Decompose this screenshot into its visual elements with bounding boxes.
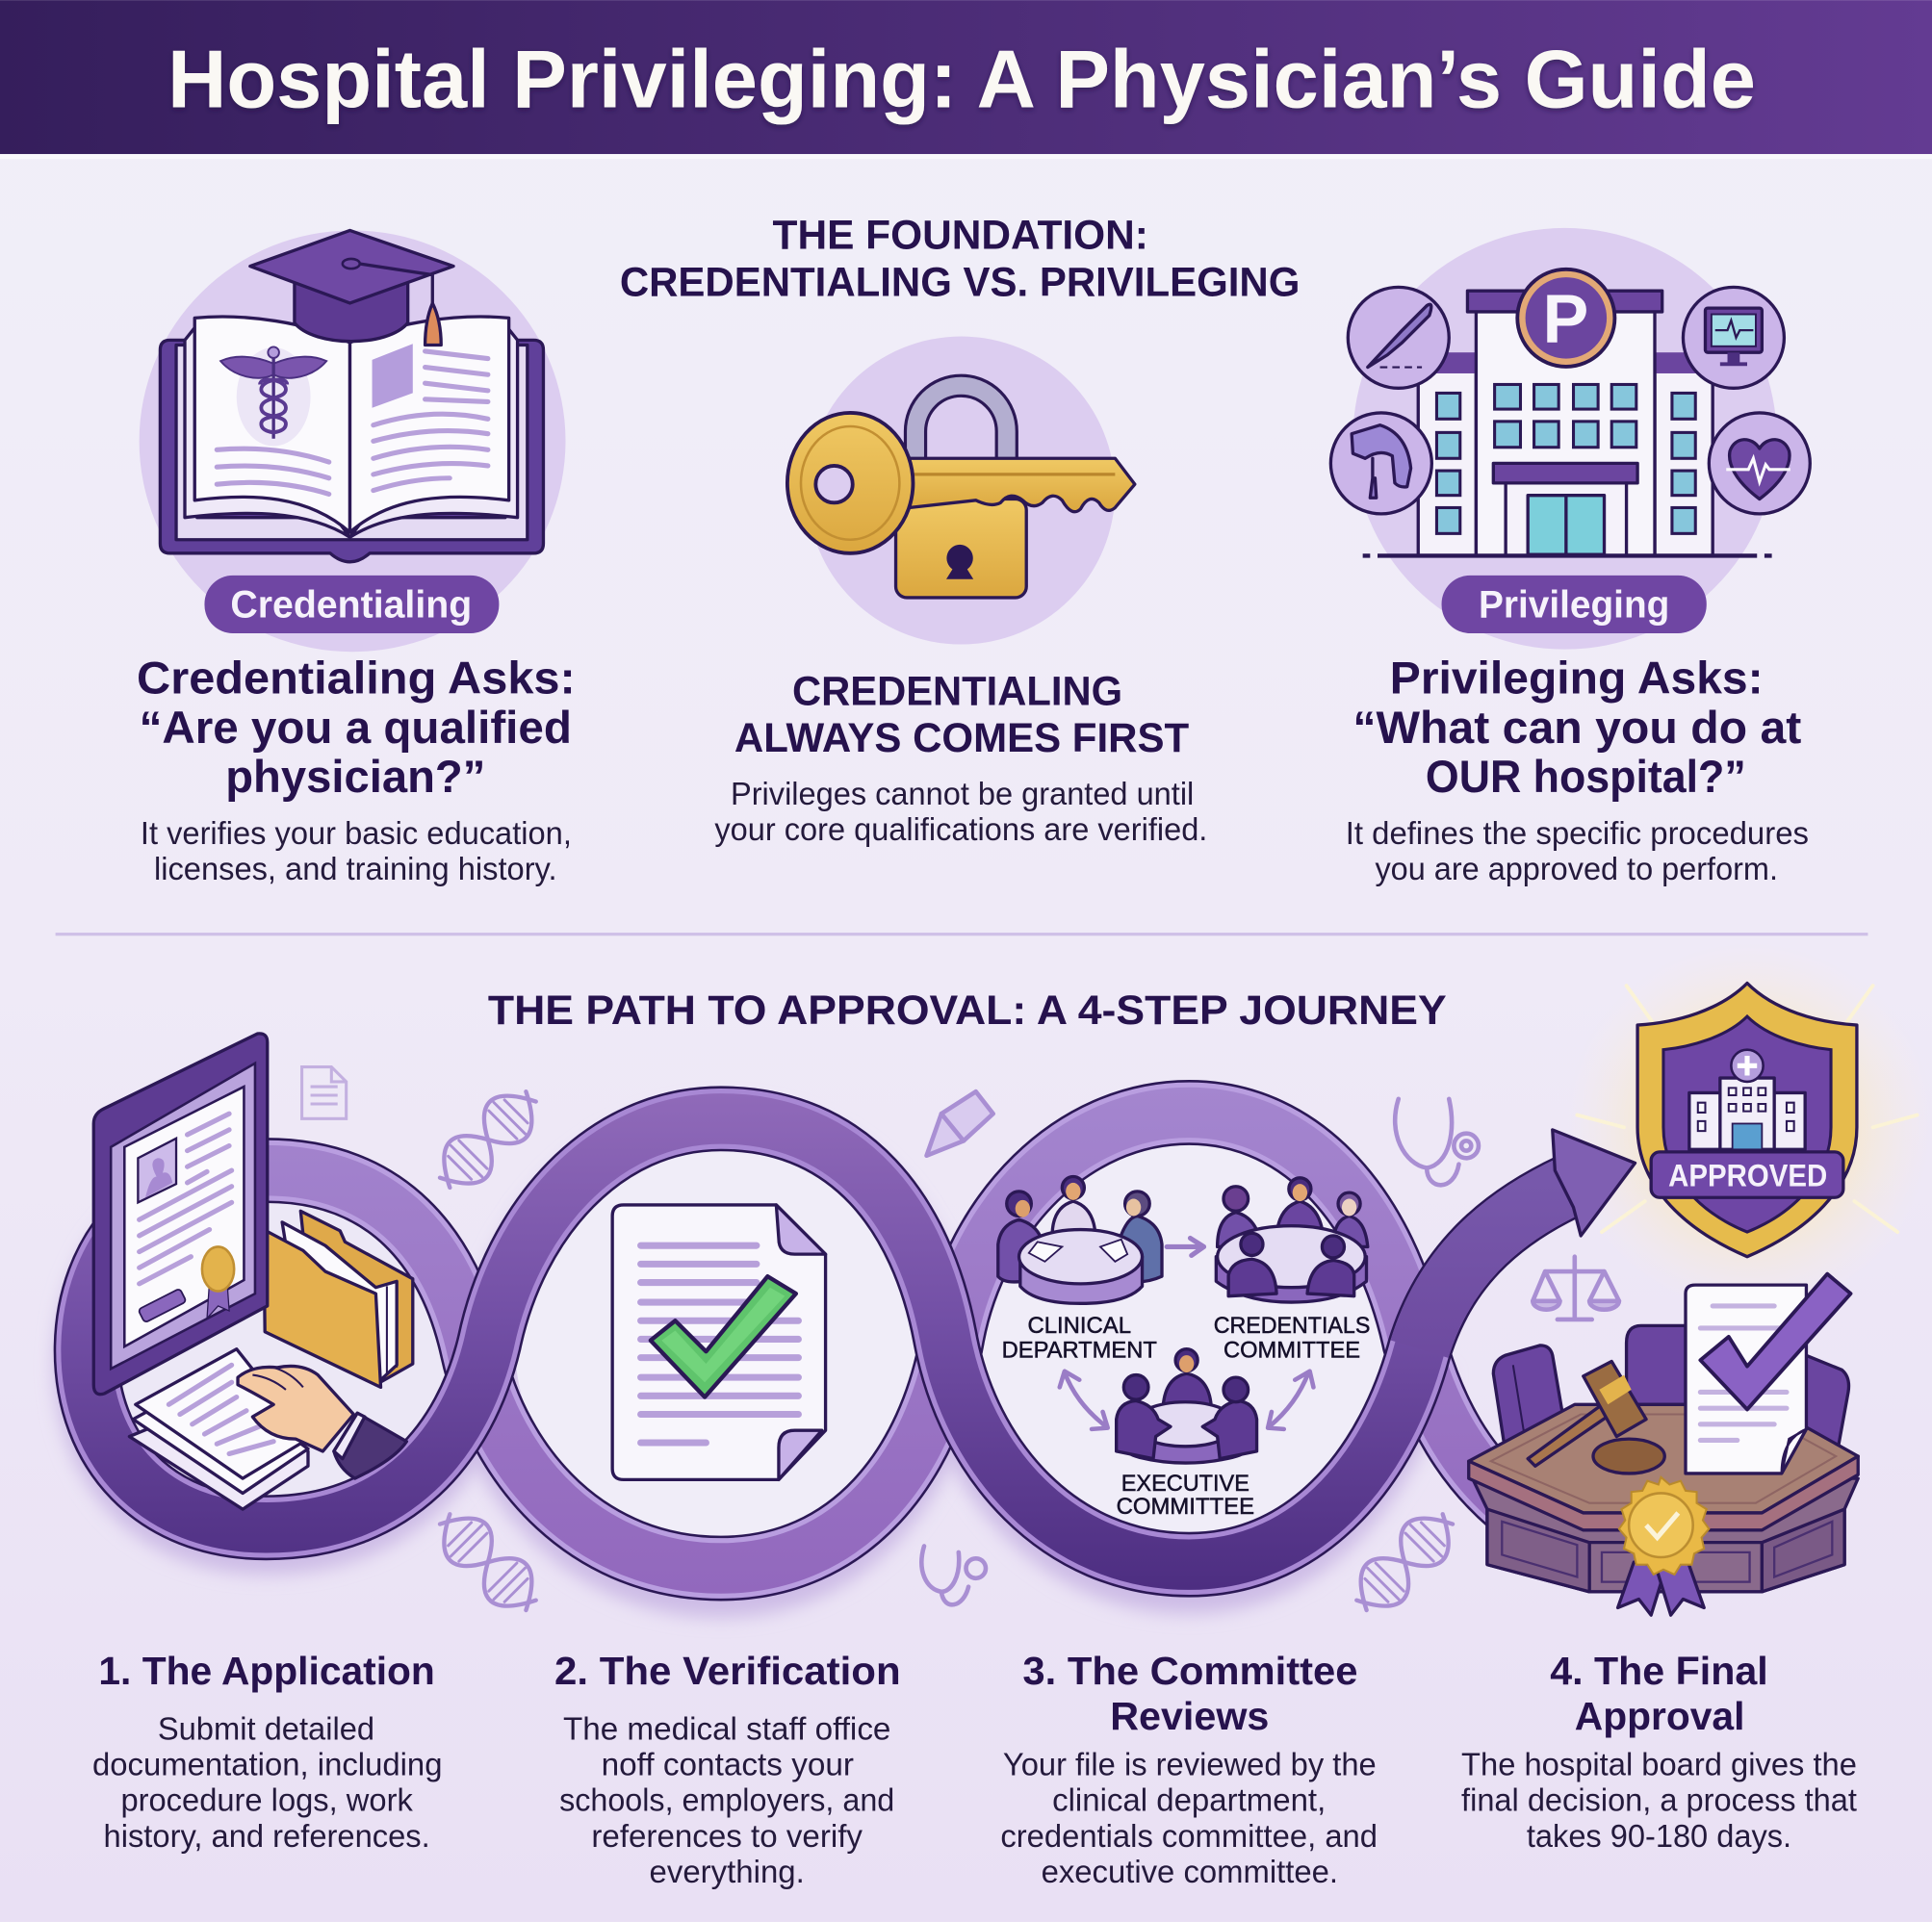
heading: credentialing asks: [137, 653, 576, 803]
icon: paper stack: [129, 1349, 308, 1509]
icon: surgical drill badge: [1330, 413, 1431, 514]
heading: credentialing always comes first: [734, 668, 1189, 760]
text: key description: your core qualifications are verified.: [714, 812, 1207, 848]
step 3 text: 3. The Committee: [1022, 1649, 1358, 1693]
arrow: department to executive: [1060, 1371, 1108, 1429]
step 2 text: noff contacts your: [602, 1748, 854, 1783]
text: credentialing description: It verifies your basic education,: [141, 816, 572, 852]
step 2 text: The medical staff office: [563, 1711, 890, 1747]
step 4 text: takes 90-180 days.: [1527, 1819, 1791, 1855]
icon: credentials committee table: [1216, 1178, 1368, 1302]
icon: tablet: [93, 1034, 268, 1395]
icon: hospital with procedure badges: [1330, 228, 1810, 650]
icon: scalpel badge: [1348, 287, 1449, 388]
step 3 text: executive committee.: [1042, 1855, 1338, 1890]
heading: credentialing always comes first: CREDENTIALING: [792, 668, 1122, 713]
icon: book with graduation cap: [140, 230, 566, 652]
step 2 illustration: verified document: [612, 1205, 826, 1479]
label: privileging pill: Privileging: [1479, 583, 1669, 626]
step 4 illustration: board table: [1469, 1274, 1858, 1615]
icon: dna bottom left: [426, 1501, 549, 1624]
label: approved banner: APPROVED: [1668, 1159, 1827, 1193]
label: credentials committee: CREDENTIALS: [1214, 1313, 1370, 1339]
step 2 text: [554, 1649, 901, 1890]
step 4 text: final decision, a process that: [1461, 1783, 1857, 1819]
icon: scales: [1533, 1257, 1619, 1320]
label: executive committee: EXECUTIVE: [1121, 1471, 1249, 1497]
step 4 text: [1461, 1649, 1857, 1855]
section heading: the foundation: CREDENTIALING VS. PRIVILEGING: [620, 259, 1300, 304]
section heading: the path to approval: THE PATH TO APPROVAL: A 4-STEP JOURNEY: [488, 987, 1447, 1033]
label: executive committee: [1117, 1471, 1254, 1520]
icon: gold seal with ribbons: [1618, 1477, 1709, 1615]
arrow: department to credentials: [1167, 1238, 1204, 1255]
step 3 illustration: committees: [998, 1176, 1370, 1520]
icon: gavel: [1528, 1361, 1664, 1474]
label: clinical department: DEPARTMENT: [1002, 1338, 1157, 1364]
step 1 text: history, and references.: [104, 1819, 430, 1855]
panel: credentialing: [137, 230, 576, 887]
icon: hospital in shield: [1689, 1050, 1805, 1149]
step 3 text: Reviews: [1110, 1694, 1269, 1738]
panel: key and lock: [714, 337, 1207, 848]
icon: caduceus: [220, 346, 326, 446]
label: clinical department: [1002, 1313, 1157, 1364]
icon: green check: [651, 1276, 796, 1397]
label: credentialing pill: Credentialing: [230, 583, 472, 626]
heading: credentialing asks: “Are you a qualified: [140, 703, 572, 754]
label: credentials committee: COMMITTEE: [1224, 1338, 1360, 1364]
title banner: [0, 0, 1932, 159]
label: executive committee: COMMITTEE: [1117, 1494, 1254, 1520]
step 1 text: Submit detailed: [158, 1711, 374, 1747]
label: credentials committee: [1214, 1313, 1370, 1364]
icon: folder: [264, 1211, 413, 1387]
icon: hand and sleeve: [238, 1366, 406, 1478]
step 4 text: The hospital board gives the: [1461, 1748, 1857, 1783]
text: credentialing description: licenses, and training history.: [154, 852, 557, 887]
step 2 text: references to verify: [591, 1819, 863, 1855]
icon: stethoscope top: [1395, 1099, 1479, 1185]
text: credentialing description: [141, 816, 572, 887]
icon: dna bottom right: [1344, 1501, 1466, 1624]
heading: privileging asks: Privileging Asks:: [1390, 653, 1764, 705]
text: privileging description: [1346, 816, 1809, 887]
icon: document outline: [302, 1067, 347, 1118]
heading: privileging asks: [1352, 653, 1802, 803]
icon: chairs: [1493, 1325, 1849, 1460]
step 4 text: Approval: [1575, 1694, 1744, 1738]
heading: privileging asks: “What can you do at: [1352, 703, 1802, 754]
step 1 text: 1. The Application: [98, 1649, 435, 1693]
step 1 illustration: application: [93, 1034, 413, 1509]
icon: pen: [927, 1091, 993, 1156]
icon: graduation cap: [250, 230, 453, 346]
icon: clinical department table: [998, 1176, 1162, 1303]
icon: executive committee table: [1117, 1349, 1257, 1463]
icon: signed paper with check: [1686, 1274, 1851, 1474]
step 3 text: clinical department,: [1052, 1783, 1326, 1819]
step 2 text: schools, employers, and: [559, 1783, 894, 1819]
step 1 text: procedure logs, work: [120, 1783, 413, 1819]
title banner: Hospital Privileging: A Physician’s Guide: [167, 33, 1756, 125]
chart: four-step ribbon path: [76, 1113, 1636, 1585]
heading: credentialing asks: Credentialing Asks:: [137, 653, 576, 705]
text: key description: Privileges cannot be granted until: [731, 777, 1194, 812]
icon: dna top: [426, 1079, 549, 1201]
text: privileging description: It defines the specific procedures: [1346, 816, 1809, 852]
icon: stethoscope bottom: [921, 1546, 986, 1604]
step 2 text: everything.: [650, 1855, 805, 1890]
step 3 text: [1000, 1649, 1378, 1890]
panel: privileging: [1330, 228, 1810, 887]
icon: monitor badge: [1683, 287, 1784, 388]
section heading: the foundation: THE FOUNDATION:: [773, 213, 1148, 258]
label: credentialing pill: [204, 576, 499, 633]
step 1 text: [92, 1649, 443, 1855]
icon: heart badge: [1709, 413, 1810, 514]
icon: key and padlock: [787, 337, 1135, 645]
heading: credentialing always comes first: ALWAYS COMES FIRST: [734, 715, 1189, 760]
text: key description: [714, 777, 1207, 848]
arrow: executive to credentials: [1268, 1371, 1313, 1429]
heading: privileging asks: OUR hospital?”: [1426, 752, 1746, 803]
label: privileging pill: [1442, 576, 1707, 633]
icon: approved shield: [1577, 984, 1918, 1257]
label: clinical department: CLINICAL: [1027, 1313, 1131, 1339]
label: approved banner: [1651, 1152, 1843, 1197]
icon: desk: [1469, 1404, 1858, 1592]
section heading: the foundation: [620, 213, 1300, 304]
text: privileging description: you are approved to perform.: [1375, 852, 1778, 887]
ribbon: lower strand: [266, 1113, 1509, 1569]
ribbon: upper strand with arrow: [87, 1118, 1636, 1565]
glow behind shield: [1565, 942, 1932, 1312]
step 3 text: credentials committee, and: [1000, 1819, 1378, 1855]
step 1 text: documentation, including: [92, 1748, 443, 1783]
step 2 text: 2. The Verification: [554, 1649, 901, 1693]
heading: credentialing asks: physician?”: [225, 752, 485, 803]
step 4 text: 4. The Final: [1550, 1649, 1768, 1693]
step 3 text: Your file is reviewed by the: [1003, 1748, 1377, 1783]
icon: hospital with procedure badges: P: [1543, 281, 1588, 358]
